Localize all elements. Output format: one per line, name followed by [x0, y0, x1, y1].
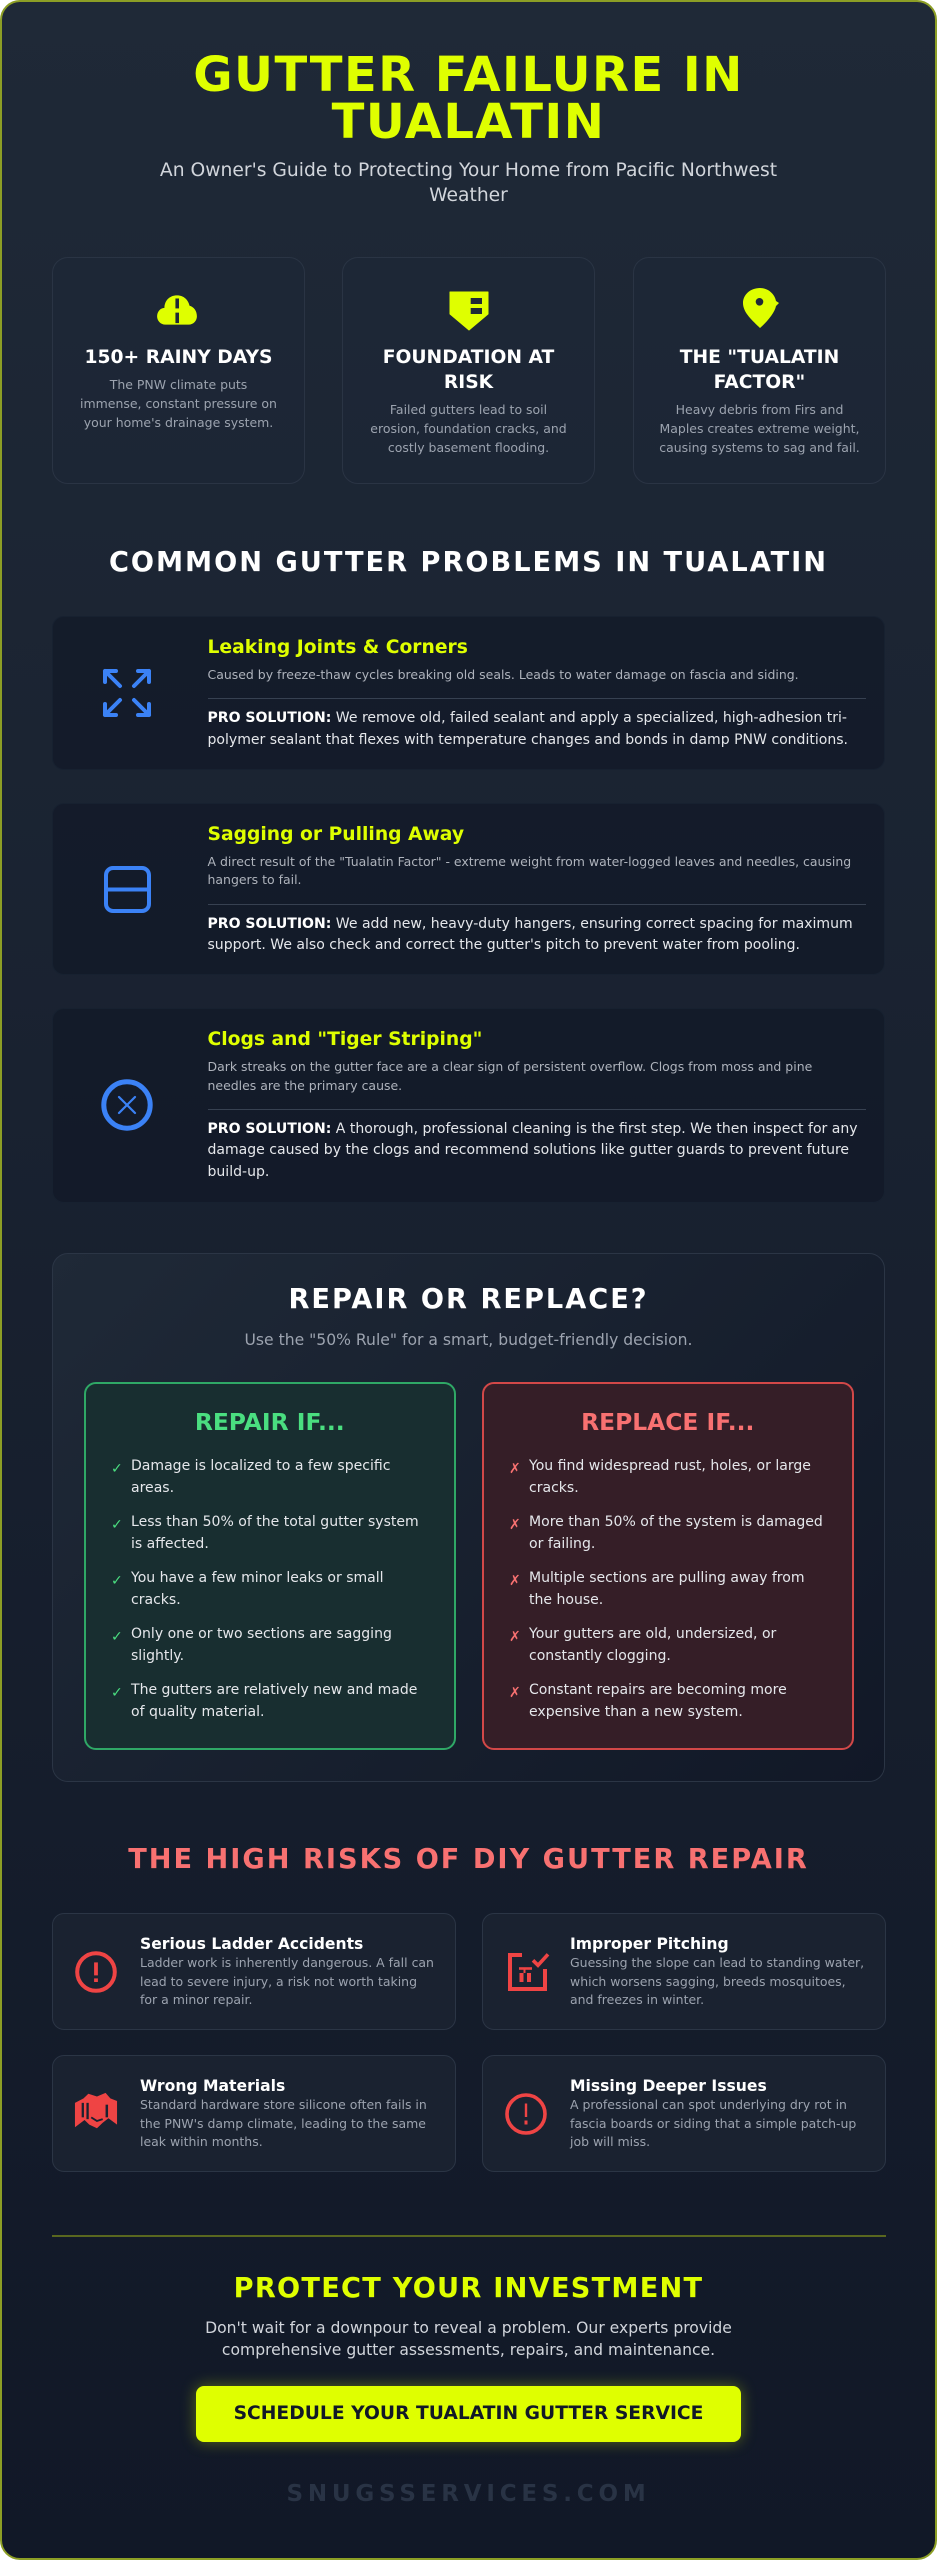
footer: website: SNUGSSERVICES.COM [286, 2481, 651, 2507]
heading: protect your investment: PROTECT YOUR INVESTMENT [234, 2273, 703, 2304]
description [370, 402, 567, 455]
pro solution: PRO SOLUTION: We add new, heavy-duty hangers, ensuring correct spacing for maximum [208, 916, 853, 932]
pro solution: polymer sealant that flexes with temperature changes and bonds in damp PNW conditions. [208, 732, 848, 748]
icon: map pin [743, 288, 779, 328]
description: needles are the primary cause. [208, 1078, 402, 1093]
description: hangers to fail. [208, 872, 302, 887]
panel: repair or replace [52, 1253, 885, 1782]
list item [509, 1458, 811, 1496]
list item: or failing. [529, 1536, 595, 1552]
list item [111, 1570, 384, 1608]
heading: RISK [444, 372, 493, 393]
heading: Clogs and "Tiger Striping" [208, 1029, 482, 1050]
list item [509, 1570, 804, 1608]
description: The PNW climate puts [110, 377, 247, 392]
list item: of quality material. [131, 1704, 264, 1720]
heading: FOUNDATION AT [383, 346, 554, 368]
description: for a minor repair. [140, 1992, 252, 2007]
list item: You have a few minor leaks or small [131, 1570, 384, 1586]
description [208, 1059, 812, 1093]
list item [111, 1682, 417, 1720]
title [193, 46, 744, 150]
pro solution: support. We also check and correct the gutter's pitch to prevent water from pooling. [208, 937, 800, 953]
panel: replace if: ✗ [509, 1573, 521, 1589]
panel: repair if: ✓ [111, 1573, 123, 1589]
description: Standard hardware store silicone often fails in [140, 2097, 427, 2112]
heading: REPAIR IF... [195, 1408, 345, 1436]
subtitle [160, 160, 777, 206]
list item: Less than 50% of the total gutter system [131, 1514, 419, 1530]
description: A direct result of the "Tualatin Factor" - extreme weight from water-logged leaves and needles, causing [208, 854, 851, 868]
panel: replace if: ✗ [509, 1517, 521, 1533]
panel: repair if: ✓ [111, 1517, 123, 1533]
description: lead to severe injury, a risk not worth taking [140, 1974, 417, 1989]
description: Maples creates extreme weight, [660, 421, 859, 436]
panel: repair if: ✓ [111, 1629, 123, 1645]
panel: repair if: ✓ [111, 1685, 123, 1701]
panel: 150+ rainy days [52, 257, 305, 484]
button: schedule service: SCHEDULE YOUR TUALATIN GUTTER SERVICE [234, 2403, 703, 2424]
description: causing systems to sag and fail. [659, 440, 860, 455]
heading: DIY risks: THE HIGH RISKS OF DIY GUTTER REPAIR [128, 1844, 809, 1875]
icon: x circle [101, 1079, 153, 1131]
description: Dark streaks on the gutter face are a clear sign of persistent overflow. Clogs from moss and pine [208, 1059, 812, 1074]
description: erosion, foundation cracks, and [370, 421, 567, 436]
pro solution: PRO SOLUTION: A thorough, professional cleaning is the first step. We then inspect for any [208, 1120, 858, 1136]
pro solution [208, 710, 848, 748]
list item: is affected. [131, 1536, 209, 1552]
icon: alert circle [75, 1951, 117, 1993]
heading: Serious Ladder Accidents [140, 1935, 363, 1953]
panel: leaking joints [52, 616, 885, 770]
subheading: 50% rule: Use the "50% Rule" for a smart, budget-friendly decision. [244, 1331, 692, 1349]
list item [111, 1626, 392, 1664]
heading: FACTOR" [714, 372, 805, 393]
heading: Leaking Joints & Corners [208, 637, 468, 658]
list item: Your gutters are old, undersized, or [529, 1626, 776, 1642]
description: costly basement flooding. [388, 440, 549, 455]
list item: areas. [131, 1480, 174, 1496]
panel: sagging [52, 803, 885, 975]
list item [509, 1682, 787, 1720]
heading: THE "TUALATIN [680, 346, 839, 368]
list item: the house. [529, 1592, 603, 1608]
heading [383, 346, 554, 393]
icon: gutter box [104, 866, 151, 913]
panel: replace if: ✗ [509, 1461, 521, 1477]
pro solution: PRO SOLUTION: We remove old, failed sealant and apply a specialized, high-adhesion tri- [208, 710, 847, 726]
pro solution: build-up. [208, 1164, 269, 1180]
title: GUTTER FAILURE IN [193, 46, 744, 102]
heading: common problems: COMMON GUTTER PROBLEMS IN TUALATIN [109, 546, 828, 578]
description: Caused by freeze-thaw cycles breaking old seals. Leads to water damage on fascia and siding. [208, 667, 799, 682]
panel: missing deeper issues [482, 2055, 886, 2172]
pro solution: damage caused by the clogs and recommend solutions like gutter guards to prevent future [208, 1142, 849, 1158]
description [659, 402, 860, 455]
description: Failed gutters lead to soil [390, 402, 547, 417]
list item [111, 1514, 419, 1552]
pro solution [208, 916, 853, 953]
panel: clogs [52, 1008, 885, 1202]
list item [509, 1626, 776, 1664]
heading [680, 346, 839, 393]
description: A professional can spot underlying dry rot in [570, 2097, 847, 2112]
description: and freezes in winter. [570, 1992, 704, 2007]
list item: The gutters are relatively new and made [131, 1682, 417, 1698]
call to action text [205, 2319, 732, 2359]
list item [111, 1458, 390, 1496]
heading: Sagging or Pulling Away [208, 824, 464, 845]
list item: Only one or two sections are sagging [131, 1626, 392, 1642]
panel: foundation at risk [342, 257, 595, 484]
heading: REPLACE IF... [581, 1408, 754, 1436]
description: Guessing the slope can lead to standing water, [570, 1955, 864, 1970]
icon: map fold [74, 2092, 118, 2128]
heading: Improper Pitching [570, 1935, 729, 1953]
panel: replace if: ✗ [509, 1629, 521, 1645]
list item [509, 1514, 823, 1552]
icon: expand arrows [102, 668, 152, 718]
icon: shield [450, 292, 488, 330]
description [80, 377, 277, 430]
description: Heavy debris from Firs and [676, 402, 843, 417]
description: Ladder work is inherently dangerous. A fall can [140, 1955, 434, 1970]
description [140, 2097, 427, 2149]
pro solution [208, 1120, 858, 1180]
heading: 150+ RAINY DAYS [84, 346, 272, 368]
icon: cloud alert [157, 295, 197, 325]
panel: replace if [482, 1382, 854, 1750]
subtitle: An Owner's Guide to Protecting Your Home from Pacific Northwest [160, 160, 777, 180]
list item: expensive than a new system. [529, 1704, 743, 1720]
description: leak within months. [140, 2134, 263, 2149]
list item: Constant repairs are becoming more [529, 1682, 787, 1698]
button: schedule service [196, 2386, 741, 2442]
panel: repair if: ✓ [111, 1461, 123, 1477]
heading: Missing Deeper Issues [570, 2077, 767, 2095]
list item: cracks. [131, 1592, 181, 1608]
description: fascia boards or siding that a simple patch-up [570, 2116, 856, 2131]
title: TUALATIN [332, 94, 605, 150]
heading: repair or replace: REPAIR OR REPLACE? [288, 1284, 649, 1315]
list item: constantly clogging. [529, 1648, 671, 1664]
icon: pitch checklist [508, 1953, 550, 1991]
description: the PNW's damp climate, leading to the same [140, 2116, 426, 2131]
description: your home's drainage system. [84, 415, 273, 430]
heading: Wrong Materials [140, 2077, 285, 2095]
list item: slightly. [131, 1648, 184, 1664]
list item: You find widespread rust, holes, or large [529, 1458, 811, 1474]
description [570, 2097, 856, 2149]
list item: cracks. [529, 1480, 579, 1496]
description: job will miss. [570, 2134, 650, 2149]
call to action text: Don't wait for a downpour to reveal a problem. Our experts provide [205, 2319, 732, 2337]
panel: ladder accidents [52, 1913, 456, 2030]
description [208, 854, 851, 887]
list item: More than 50% of the system is damaged [529, 1514, 823, 1530]
list item: Damage is localized to a few specific [131, 1458, 390, 1474]
description [140, 1955, 434, 2007]
panel: replace if: ✗ [509, 1685, 521, 1701]
panel: the Tualatin factor [633, 257, 886, 484]
panel: repair if [84, 1382, 456, 1750]
subtitle: Weather [429, 185, 508, 206]
description: immense, constant pressure on [80, 396, 277, 411]
panel: wrong materials [52, 2055, 456, 2172]
call to action text: comprehensive gutter assessments, repairs, and maintenance. [222, 2341, 715, 2359]
icon: alert circle [505, 2093, 547, 2135]
panel: improper pitching [482, 1913, 886, 2030]
list item: Multiple sections are pulling away from [529, 1570, 804, 1586]
description [570, 1955, 864, 2007]
description: which worsens sagging, breeds mosquitoes, [570, 1974, 846, 1989]
